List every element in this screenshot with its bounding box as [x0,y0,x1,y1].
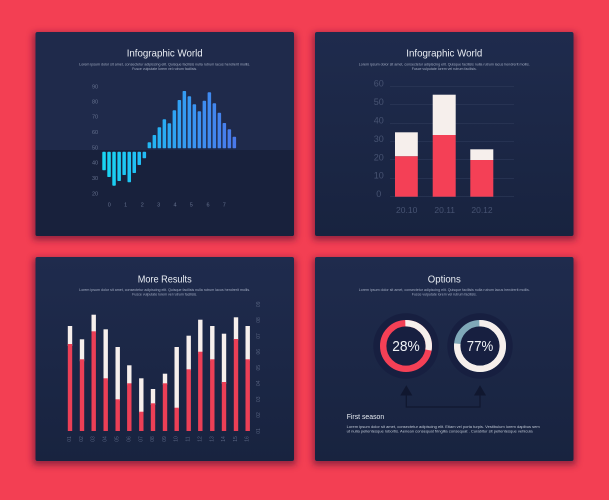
right axis labels: 03 [256,396,262,402]
negative bars [102,152,146,186]
body text [347,425,540,434]
y axis labels: 20 [92,191,98,197]
x axis labels: 4 [173,203,177,209]
y axis labels: 50 [92,145,98,151]
y axis labels: 80 [92,100,98,106]
description text: Lorem ipsum dolor sit amet, consectetur adipiscing elit. Quisque facilisis nulla rutrum lacus hendrerit mollis. [79,288,250,292]
bottom axis labels: 12 [197,436,203,442]
y axis labels: 20 [374,152,384,162]
x axis labels: 6 [206,203,210,209]
bottom axis labels: 11 [186,436,192,442]
description text [79,62,250,71]
heading: Infographic World [127,48,203,60]
x axis labels: 2 [141,203,144,209]
description text [359,288,530,296]
donut: 28%: 28% [392,339,420,355]
panel: infographic world stacked bars [313,32,576,240]
heading: More Results [138,273,192,285]
description text: Lorem ipsum dolor sit amet, consectetur adipiscing elit. Quisque facilisis nulla rutrum lacus hendrerit mollis. [359,62,530,66]
y axis labels: 40 [92,161,98,167]
stacked bars: cream segments [68,315,250,413]
x axis labels: 3 [157,203,160,209]
right axis labels [256,301,262,434]
description text: Fusce vulputate lorem vel rutrum facilisis. [412,292,477,296]
panel: options [313,257,576,465]
bottom axis labels: 07 [138,436,144,442]
x axis labels: 20.11 [434,205,455,215]
heading: Options [428,273,461,285]
bottom axis labels: 14 [221,436,227,442]
description text: Fusce vulputate lorem vel rutrum facilisis. [132,67,197,71]
bottom axis labels: 01 [67,436,73,442]
right axis labels: 04 [256,380,262,386]
bar 20.10 [395,132,418,197]
right axis labels: 08 [256,317,262,323]
bottom axis labels: 09 [162,436,168,442]
right axis labels: 06 [256,349,262,354]
description text: Lorem ipsum dolor sit amet, consectetur adipiscing elit. Quisque facilisis nulla rutrum lacus hendrerit mollis. [359,288,530,292]
bottom axis labels: 10 [174,436,180,442]
x axis labels: 0 [108,203,111,209]
y axis labels: 30 [92,176,98,182]
body text: ut nulla pellentesque lobortis. Aenean consequat fringilla consequat . Curabitur sit pellentesque vehicula [347,430,534,434]
right axis labels: 05 [256,365,262,370]
panel: more results [33,257,296,465]
y axis labels [92,84,98,197]
sub heading: first season: First season [347,412,384,421]
donut: 28% [373,313,439,379]
description text [79,288,250,296]
bottom axis labels: 16 [245,436,251,442]
right axis labels: 09 [256,301,262,307]
stacked bars: red segments [68,331,250,431]
right axis labels: 07 [256,333,262,339]
panel: infographic world blue chart [33,32,296,240]
y axis labels: 90 [92,84,98,90]
y axis labels: 30 [374,134,384,144]
bottom axis labels: 05 [115,436,121,442]
bar 20.11 [433,95,456,197]
y axis labels: 60 [374,78,384,88]
y axis labels [374,78,384,199]
heading: Infographic World [406,48,482,60]
right axis labels: 02 [256,412,262,418]
y axis labels: 10 [374,170,384,180]
bar 20.12 [470,149,493,197]
donut: 77%: 77% [467,339,493,355]
y axis labels: 0 [376,189,381,199]
x axis labels: 20.12 [471,205,493,215]
bottom axis labels: 15 [233,436,239,442]
positive bars [148,91,236,148]
x axis labels: 20.10 [396,205,418,215]
y axis labels: 60 [92,130,98,136]
bottom axis labels: 08 [150,436,156,442]
x axis labels: 1 [124,203,127,209]
bottom axis labels [67,436,251,442]
x axis labels [396,205,493,215]
description text: Lorem ipsum dolor sit amet, consectetur adipiscing elit. Quisque facilisis nulla rutrum lacus hendrerit mollis. [79,62,250,66]
body text: Lorem ipsum dolor sit amet, consectetur adipiscing elit. Etiam vel porta turpis. Vestibulum lorem dapibus sem [347,425,540,429]
donut: 77% [447,313,513,379]
bottom axis labels: 06 [126,436,132,442]
bottom axis labels: 04 [103,436,109,442]
arrow connector [400,385,486,407]
y axis labels: 40 [374,116,384,126]
description text: Fusce vulputate lorem vel rutrum facilisis. [412,67,477,71]
bottom axis labels: 02 [79,436,85,442]
description text [359,62,530,71]
y axis labels: 50 [374,97,384,107]
bottom axis labels: 13 [209,436,215,442]
x axis labels [108,203,226,209]
bottom axis labels: 03 [91,436,97,442]
x axis labels: 5 [190,203,193,209]
y axis labels: 70 [92,115,98,121]
right axis labels: 01 [256,428,262,434]
x axis labels: 7 [223,203,226,209]
description text: Fusce vulputate lorem vel rutrum facilisis. [132,292,197,296]
